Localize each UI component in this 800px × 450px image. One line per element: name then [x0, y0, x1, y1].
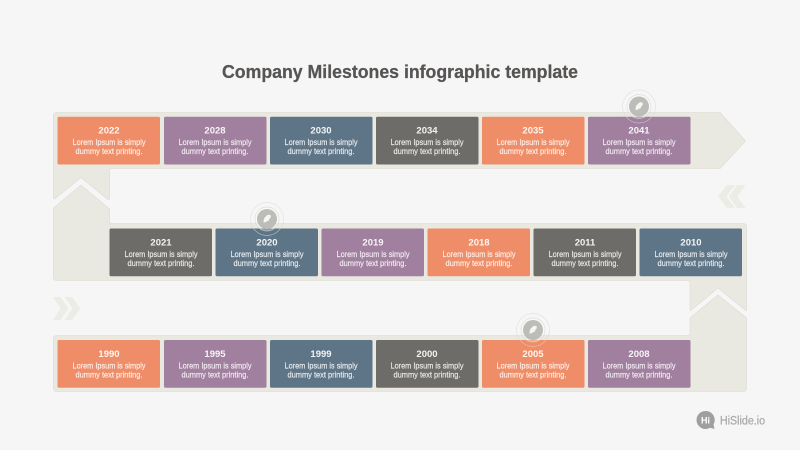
logo: HiSlide.io: Hi	[701, 416, 710, 426]
milestone 2022: dummy text printing.	[76, 147, 142, 156]
milestone 2022: 2022	[98, 126, 120, 136]
milestone 2019: 2019	[362, 237, 384, 248]
milestone 2010: dummy text printing.	[658, 259, 724, 268]
milestone 1999	[270, 340, 372, 388]
milestone 2005: 2005	[522, 349, 544, 360]
milestone 2021: Lorem Ipsum is simply	[124, 250, 198, 259]
milestone 2041	[588, 117, 690, 164]
icon: marker above 2041	[622, 90, 656, 123]
milestone 2000: Lorem Ipsum is simply	[390, 361, 464, 370]
milestone 2034: 2034	[416, 126, 438, 136]
milestone 2008	[588, 340, 690, 388]
milestone 2000: 2000	[416, 349, 438, 360]
milestone 2008: dummy text printing.	[606, 370, 672, 380]
milestone 1999: Lorem Ipsum is simply	[284, 361, 358, 370]
milestone 2005: Lorem Ipsum is simply	[496, 361, 570, 370]
title: Company Milestones infographic template	[222, 62, 578, 82]
milestone 2034: dummy text printing.	[394, 147, 460, 156]
milestone 2034	[376, 117, 478, 164]
milestone 2010: Lorem Ipsum is simply	[654, 250, 728, 259]
milestone 1990: Lorem Ipsum is simply	[72, 361, 146, 370]
milestone 2008: Lorem Ipsum is simply	[602, 361, 676, 370]
milestone 2019: dummy text printing.	[340, 259, 406, 268]
milestone 2011: Lorem Ipsum is simply	[548, 250, 622, 259]
milestone 1999: dummy text printing.	[288, 370, 354, 380]
milestone 2010	[640, 228, 742, 276]
icon: marker above 2005	[516, 314, 550, 346]
milestone 1995	[164, 340, 266, 388]
milestone 2018: dummy text printing.	[446, 259, 512, 268]
milestone 2021	[110, 228, 212, 276]
icon: marker above 2020	[250, 202, 284, 236]
milestone 1999: 1999	[310, 349, 332, 360]
path segment: top band with arrow	[54, 112, 746, 200]
chevrons: direction right	[53, 297, 80, 320]
path segment: middle band	[54, 185, 746, 311]
milestone 2005	[482, 340, 584, 388]
milestone 2030	[270, 117, 372, 164]
milestone 2010: 2010	[680, 237, 702, 248]
milestone 1995: Lorem Ipsum is simply	[178, 361, 252, 370]
milestone 2028	[164, 117, 266, 164]
milestone 1995: 1995	[204, 349, 226, 360]
milestone 2019	[322, 228, 424, 276]
milestone 2035: dummy text printing.	[500, 147, 566, 156]
milestone 2028: Lorem Ipsum is simply	[178, 138, 252, 147]
milestone 2019: Lorem Ipsum is simply	[336, 250, 410, 259]
milestone 2041: Lorem Ipsum is simply	[602, 138, 676, 147]
milestone 2018: Lorem Ipsum is simply	[442, 250, 516, 259]
milestone 2030: 2030	[310, 126, 332, 136]
milestone 2030: Lorem Ipsum is simply	[284, 138, 358, 147]
milestone 2020	[216, 228, 318, 276]
path segment: bottom band	[54, 295, 746, 392]
milestone 2005: dummy text printing.	[500, 370, 566, 380]
milestone 2028: 2028	[204, 126, 226, 136]
logo: HiSlide.io	[697, 411, 765, 429]
milestone 2011	[534, 228, 636, 276]
milestone 1990: dummy text printing.	[76, 370, 142, 380]
milestone 2035	[482, 117, 584, 164]
milestone 2011: dummy text printing.	[552, 259, 618, 268]
milestone 2041: 2041	[628, 126, 650, 136]
milestone 2041: dummy text printing.	[606, 147, 672, 156]
milestone 2000	[376, 340, 478, 388]
milestone 2030: dummy text printing.	[288, 147, 354, 156]
logo: HiSlide.io: HiSlide.io	[720, 416, 765, 428]
milestone 2020: 2020	[256, 237, 278, 248]
milestone 2018: 2018	[468, 237, 490, 248]
milestone 2020: Lorem Ipsum is simply	[230, 250, 304, 259]
milestone 1990: 1990	[98, 349, 120, 360]
milestone 2028: dummy text printing.	[182, 147, 248, 156]
milestone 2018	[428, 228, 530, 276]
milestone 2000: dummy text printing.	[394, 370, 460, 380]
milestone 2011: 2011	[575, 237, 596, 248]
milestone 2022	[58, 117, 160, 164]
milestone 2035: Lorem Ipsum is simply	[496, 138, 570, 147]
milestone 1995: dummy text printing.	[182, 370, 248, 380]
milestone 2021: dummy text printing.	[128, 259, 194, 268]
milestone 1990	[58, 340, 160, 388]
milestone 2008: 2008	[628, 349, 650, 360]
milestone 2022: Lorem Ipsum is simply	[72, 138, 146, 147]
milestone 2034: Lorem Ipsum is simply	[390, 138, 464, 147]
milestone 2035: 2035	[522, 126, 544, 136]
milestone 2020: dummy text printing.	[234, 259, 300, 268]
chevrons: direction left	[718, 185, 746, 208]
milestone 2021: 2021	[150, 237, 172, 248]
